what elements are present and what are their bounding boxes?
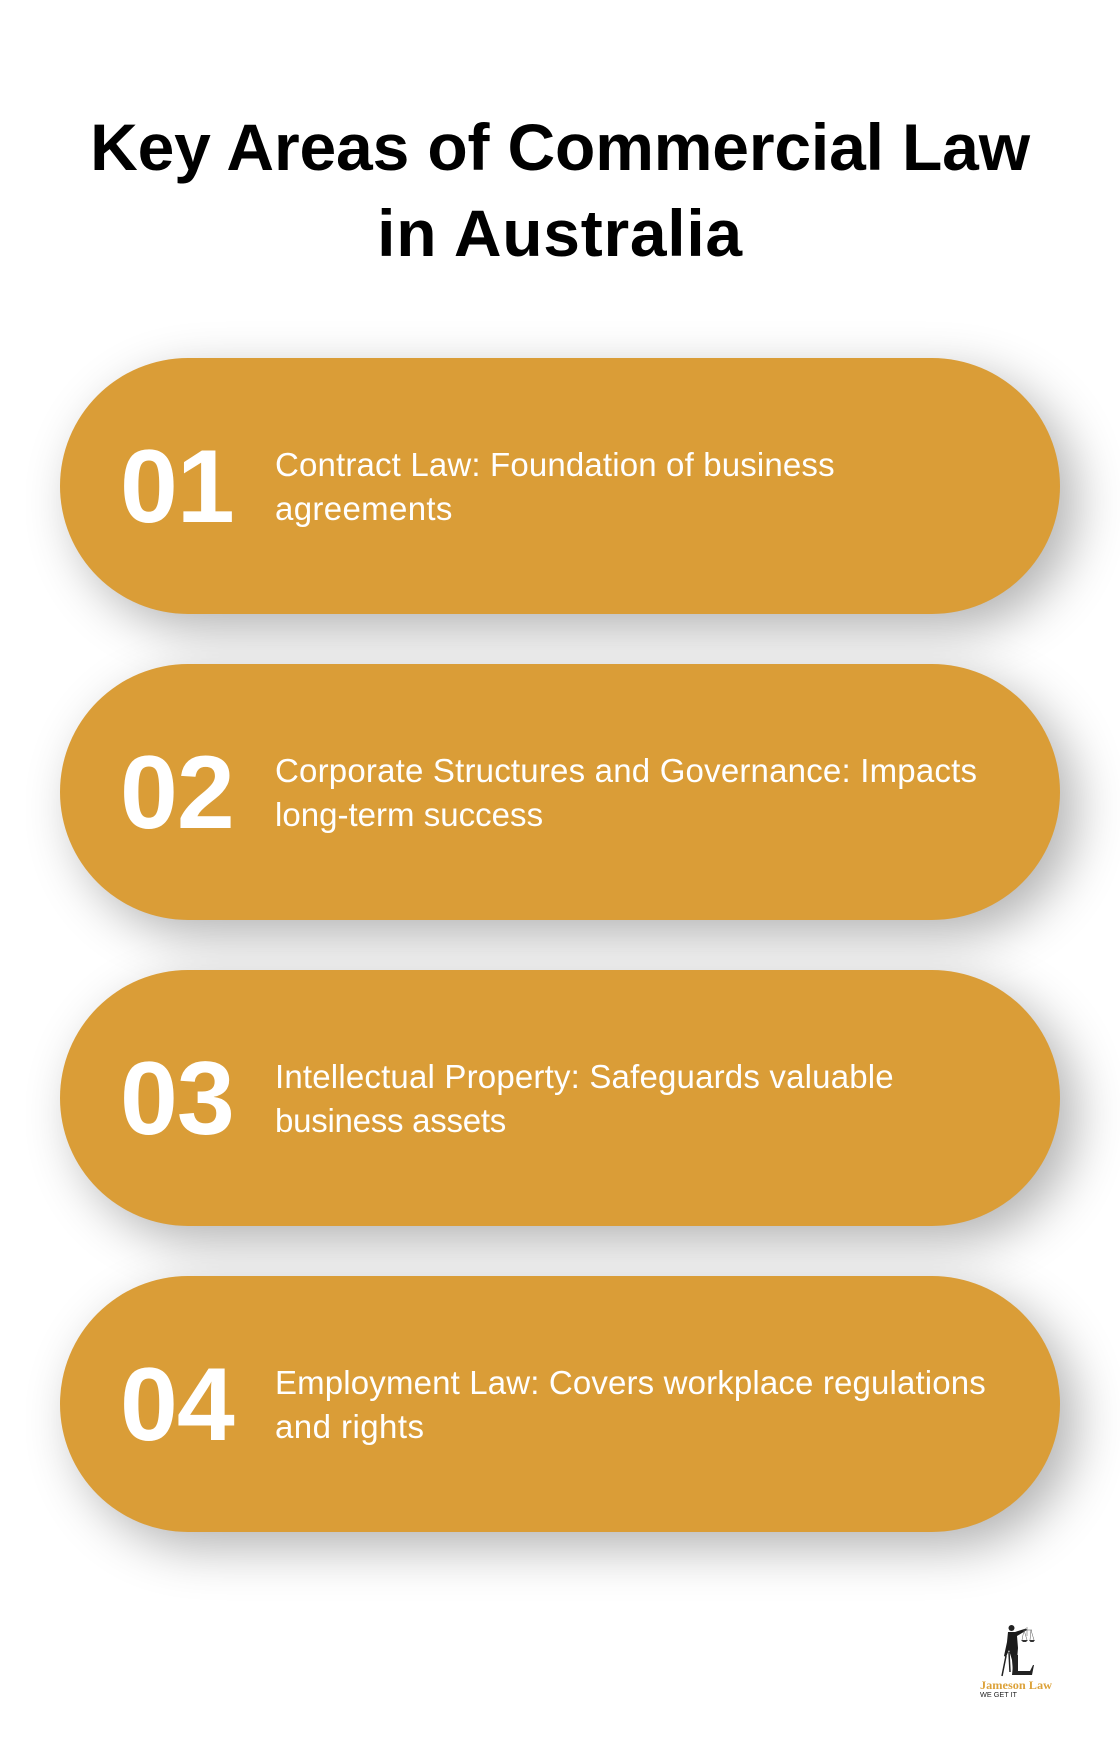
title: in Australia <box>377 196 743 270</box>
text: intellectual property <box>275 1058 894 1139</box>
text: corporate structures: long-term success <box>275 796 543 833</box>
text: contract law: agreements <box>275 490 453 527</box>
title: Key Areas of Commercial Law <box>90 110 1030 184</box>
panel: item 03 intellectual property <box>60 970 1060 1226</box>
text: employment law <box>275 1364 986 1445</box>
text: contract law <box>275 446 835 527</box>
icon: justice figure with scales <box>1002 1625 1035 1676</box>
number 02: 02 <box>120 735 234 851</box>
text: intellectual property: business assets <box>275 1102 506 1139</box>
logo tagline: WE GET IT <box>980 1692 1018 1699</box>
panel: item 04 employment law <box>60 1276 1060 1532</box>
number 04: 04 <box>120 1347 234 1463</box>
number 03: 03 <box>120 1041 234 1157</box>
text: contract law: Contract Law: Foundation of business <box>275 446 835 483</box>
icon: Jameson Law logo <box>980 1625 1052 1699</box>
title <box>90 110 1030 270</box>
text: corporate structures <box>275 752 977 833</box>
logo name: Jameson Law <box>980 1678 1052 1692</box>
number 01: 01 <box>120 429 234 545</box>
panel: item 01 contract law <box>60 358 1060 614</box>
text: employment law: and rights <box>275 1408 424 1445</box>
text: employment law: Employment Law: Covers workplace regulations <box>275 1364 986 1401</box>
text: intellectual property: Intellectual Property: Safeguards valuable <box>275 1058 894 1095</box>
text: corporate structures: Corporate Structures and Governance: Impacts <box>275 752 977 789</box>
panel: item 02 corporate structures <box>60 664 1060 920</box>
